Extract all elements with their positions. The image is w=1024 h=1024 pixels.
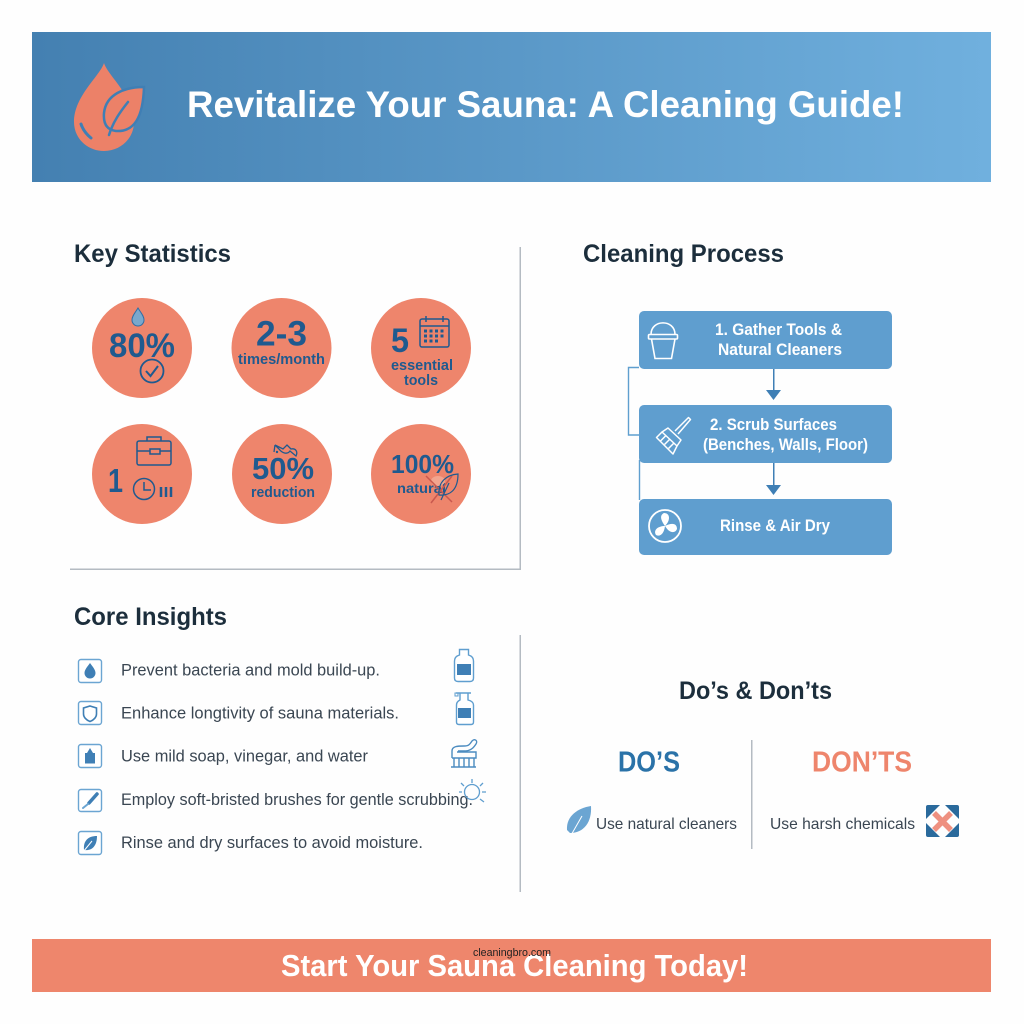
don'ts column: DON’TS: [812, 746, 912, 778]
stat: 100% natural: 100%: [391, 449, 454, 479]
step 1: 1. Gather Tools &: [715, 321, 842, 339]
insight 2: Enhance longtivity of sauna materials.: [121, 704, 399, 722]
panel: core insights list: [78, 650, 486, 854]
icon: spray bottle: [455, 693, 474, 724]
stat: 5 essential tools: 5: [391, 322, 409, 360]
step 3: [639, 499, 892, 555]
do's column: Use natural cleaners: [596, 816, 737, 833]
icon: x mark: [926, 805, 959, 837]
icon: water drop with leaf: [74, 63, 144, 151]
panel: cleaning process flowchart: [628, 311, 892, 555]
stat: 5 essential tools: [371, 298, 471, 398]
stat: 5 essential tools: tools: [404, 373, 438, 389]
stat: 50% reduction: reduction: [251, 484, 315, 501]
insight 3: Use mild soap, vinegar, and water: [121, 746, 368, 766]
insight 1: Prevent bacteria and mold build-up.: [121, 660, 380, 680]
panel: do's and don'ts: [567, 740, 959, 849]
insight 1: [78, 660, 380, 682]
insight 4: Employ soft-bristed brushes for gentle scrubbing.: [121, 790, 473, 809]
insight 5: Rinse and dry surfaces to avoid moisture.: [121, 833, 423, 852]
stat: 50% reduction: 50%: [252, 451, 314, 486]
watermark: cleaningbro.com: [473, 947, 551, 959]
stat: 80%: 80%: [109, 327, 175, 365]
stat: 50% reduction: [232, 424, 332, 524]
insight 3: [78, 744, 368, 768]
step 3: Rinse & Air Dry: [720, 517, 831, 535]
header banner: [32, 32, 991, 182]
icon: cleaning brush: [451, 740, 477, 767]
stat: 2-3 times/month: times/month: [238, 352, 325, 368]
stat: 1 toolbox and clock: [92, 424, 192, 524]
don'ts column: [770, 746, 959, 837]
step 1: Natural Cleaners: [718, 341, 842, 359]
heading: core insights: Core Insights: [74, 603, 227, 631]
step 2: 2. Scrub Surfaces: [710, 416, 837, 434]
stat: 2-3 times/month: [232, 298, 332, 398]
arrow: step 1 to 2: [766, 369, 781, 400]
call to action: Start Your Sauna Cleaning Today!: [281, 948, 748, 983]
stat: 100% natural: [371, 424, 471, 524]
stat: 80%: [92, 298, 192, 398]
do's column: DO’S: [618, 746, 680, 778]
icon: scrub brush: [656, 418, 690, 454]
panel: key statistics circles: [92, 298, 471, 524]
stat: 100% natural: natural: [397, 480, 446, 496]
icon: sun: [459, 779, 486, 802]
stat: 1 toolbox and clock: 1: [108, 462, 123, 499]
heading: do's and don'ts: Do’s & Don’ts: [679, 677, 832, 705]
heading: key statistics: Key Statistics: [74, 240, 231, 268]
step 1: [639, 311, 892, 369]
heading: cleaning process: Cleaning Process: [583, 240, 784, 268]
icon: leaf: [567, 806, 591, 837]
stat: 5 essential tools: essential: [391, 358, 453, 374]
title: Revitalize Your Sauna: A Cleaning Guide!: [187, 84, 904, 125]
arrow: step 2 to 3: [766, 463, 781, 495]
don'ts column: Use harsh chemicals: [770, 816, 915, 833]
step 2: [639, 405, 892, 463]
footer banner: [32, 939, 991, 992]
icon: bottle: [454, 650, 474, 682]
icon: fan: [649, 510, 681, 542]
step 2: (Benches, Walls, Floor): [703, 436, 868, 454]
stat: 2-3 times/month: 2-3: [256, 314, 307, 354]
icon: bucket: [648, 323, 678, 358]
connector bracket: [628, 368, 640, 500]
do's column: [567, 746, 737, 837]
